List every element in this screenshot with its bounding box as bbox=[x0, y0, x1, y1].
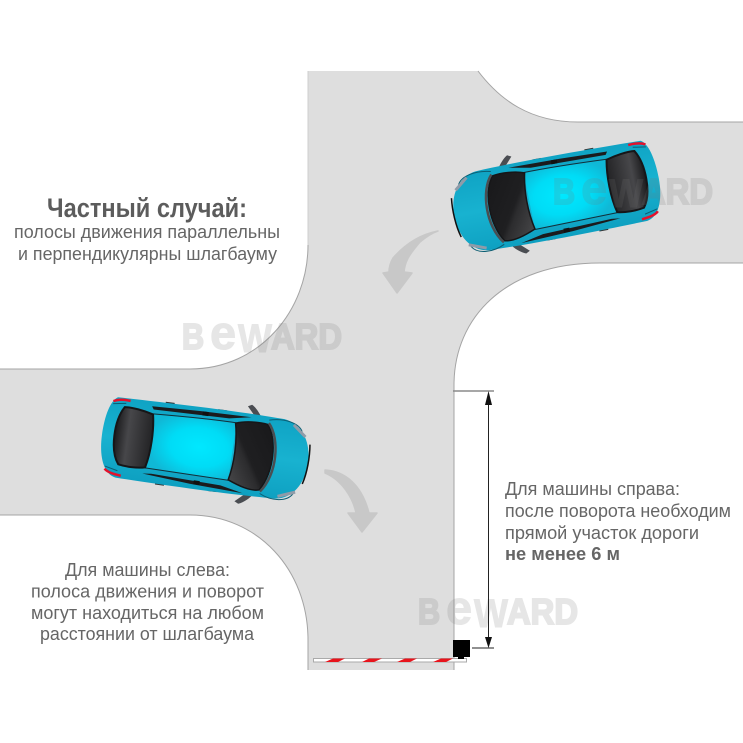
text: left car note: расстоянии от шлагбаума bbox=[40, 624, 255, 644]
watermark: bottom bbox=[418, 581, 578, 636]
text: left car note: могут находиться на любом bbox=[31, 603, 264, 623]
barrier bbox=[314, 640, 470, 662]
watermark: top right bbox=[553, 161, 713, 216]
text: right car note: после поворота необходим bbox=[505, 501, 731, 521]
watermark: top right: W bbox=[609, 172, 643, 216]
text: lane description: и перпендикулярны шлагбауму bbox=[18, 244, 277, 264]
text: left car note bbox=[31, 560, 264, 644]
watermark: top right: e bbox=[581, 161, 607, 214]
watermark: bottom: e bbox=[446, 581, 472, 634]
car: left bbox=[95, 386, 315, 512]
text: lane description: полосы движения параллельны bbox=[14, 222, 280, 242]
car: right bbox=[445, 129, 668, 265]
watermark: centre: W bbox=[238, 317, 272, 361]
heading: Частный случай: bbox=[47, 193, 247, 223]
watermark: bottom: B bbox=[418, 593, 440, 633]
arrow: left car turn bbox=[325, 470, 377, 532]
watermark: centre bbox=[182, 306, 342, 361]
text: right car note bbox=[505, 479, 731, 564]
watermark: bottom: W bbox=[474, 592, 508, 636]
text: lane description bbox=[14, 222, 280, 264]
text: right car note: прямой участок дороги bbox=[505, 523, 699, 543]
watermark: top right: ARD bbox=[642, 171, 713, 212]
watermark: bottom: ARD bbox=[507, 591, 578, 632]
text: left car note: Для машины слева: bbox=[65, 560, 230, 580]
arrow: right car turn bbox=[383, 231, 438, 293]
text: right car note: Для машины справа: bbox=[505, 479, 680, 499]
watermark: top right: B bbox=[553, 173, 575, 213]
watermark: centre: B bbox=[182, 318, 204, 358]
watermark: centre: ARD bbox=[271, 316, 342, 357]
dimension arrow: 6 m bbox=[453, 391, 494, 648]
text: right car note: не менее 6 м bbox=[505, 544, 620, 564]
watermark: centre: e bbox=[210, 306, 236, 359]
text: left car note: полоса движения и поворот bbox=[31, 582, 264, 602]
